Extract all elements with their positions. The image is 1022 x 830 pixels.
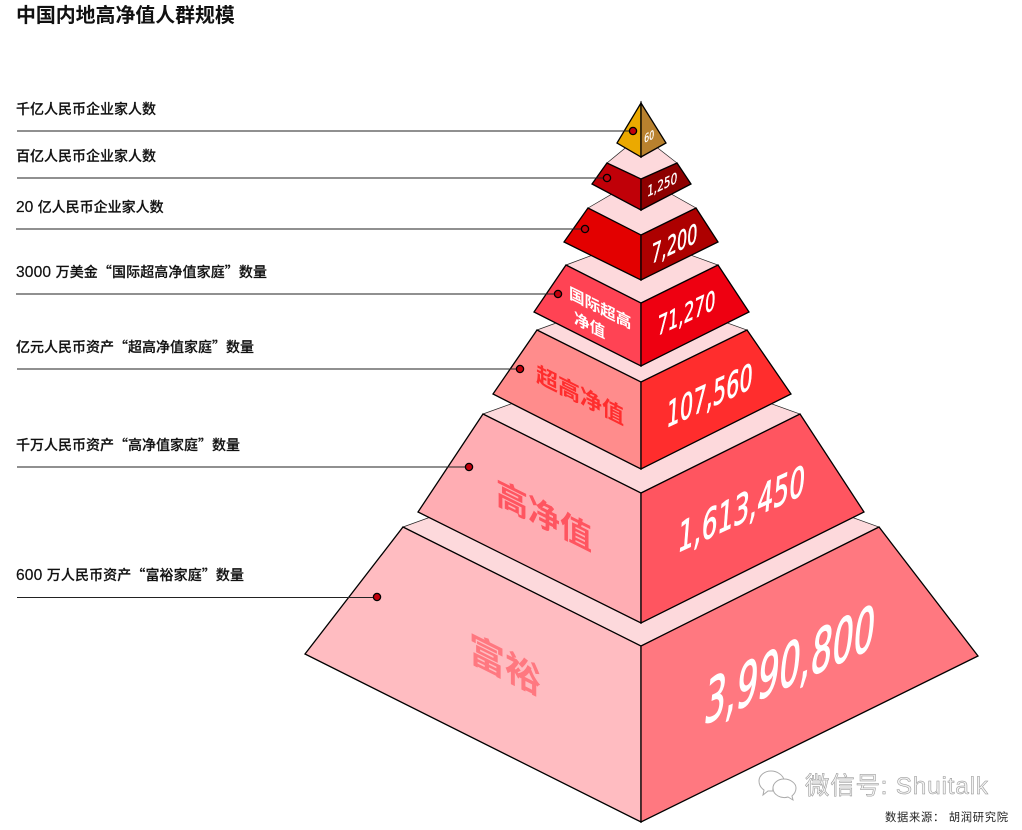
right face xyxy=(641,414,864,623)
tier top xyxy=(537,292,747,382)
tier top xyxy=(403,441,879,646)
tier: 超高净值 xyxy=(493,292,791,469)
label: 富裕: 富裕 xyxy=(469,628,541,704)
tier top xyxy=(483,357,800,493)
label: 国际超高净值: 净值 xyxy=(574,309,605,342)
source: 数据来源： 胡润研究院 xyxy=(885,810,1008,824)
tier: 国际超高净值 xyxy=(534,237,749,366)
left face xyxy=(418,414,641,623)
callout: 3000万美金: 3000 万美金“国际超高净值家庭”数量 xyxy=(16,262,267,282)
callout: 亿元 xyxy=(16,337,524,373)
callout: 600万 xyxy=(16,565,381,601)
value: 1,613,450: 1,613,450 xyxy=(676,456,807,563)
right face xyxy=(641,163,691,210)
label: 高净值: 高净值 xyxy=(496,475,592,559)
right face xyxy=(641,330,791,469)
callout: 千亿人民币企业家人数: 千亿人民币企业家人数 xyxy=(16,99,156,119)
icon: wechat bubbles xyxy=(759,771,796,800)
callout: 百亿人民币企业家人数: 百亿人民币企业家人数 xyxy=(16,146,156,166)
tier top xyxy=(607,135,677,179)
left face xyxy=(305,527,641,822)
tier top xyxy=(588,177,696,235)
title: 中国内地高净值人群规模 xyxy=(16,3,235,27)
right face xyxy=(641,208,718,280)
tier: 高净值 xyxy=(418,357,864,623)
left face xyxy=(493,330,641,469)
label: 国际超高净值: 国际超高 xyxy=(569,283,631,333)
right face xyxy=(641,103,666,157)
callout: 千万: 千万人民币资产“高净值家庭”数量 xyxy=(16,435,240,455)
pyramid xyxy=(305,103,978,822)
tier top xyxy=(566,237,718,303)
callout: 20亿人民币企业家人数 xyxy=(16,197,589,233)
value: 1,250: 1,250 xyxy=(647,168,678,201)
callout: 3000万美金 xyxy=(16,262,562,298)
value: 7,200: 7,200 xyxy=(651,217,698,271)
tier: 千亿 xyxy=(617,103,666,157)
value: 60: 60 xyxy=(644,127,655,146)
right face xyxy=(641,265,749,366)
callout: 千万 xyxy=(16,435,473,471)
tier: 20亿 xyxy=(564,177,718,280)
right face xyxy=(641,527,978,822)
left face xyxy=(534,265,641,366)
value: 3,990,800: 3,990,800 xyxy=(701,591,879,740)
tier: 富裕 xyxy=(305,441,978,822)
value: 71,270: 71,270 xyxy=(657,284,716,343)
callout: 亿元: 亿元人民币资产“超高净值家庭”数量 xyxy=(16,337,254,357)
callout: 千亿人民币企业家人数 xyxy=(16,99,637,135)
callout: 20亿人民币企业家人数: 20 亿人民币企业家人数 xyxy=(16,197,164,217)
label: 超高净值: 超高净值 xyxy=(536,361,624,430)
left face xyxy=(617,103,641,157)
left face xyxy=(564,208,641,280)
tier: 百亿 xyxy=(592,135,691,210)
watermark: 微信号: Shuitalk xyxy=(805,772,989,800)
value: 107,560: 107,560 xyxy=(665,355,754,437)
left face xyxy=(592,163,641,210)
callout: 600万: 600 万人民币资产“富裕家庭”数量 xyxy=(16,565,244,585)
callout: 百亿人民币企业家人数 xyxy=(16,146,611,182)
